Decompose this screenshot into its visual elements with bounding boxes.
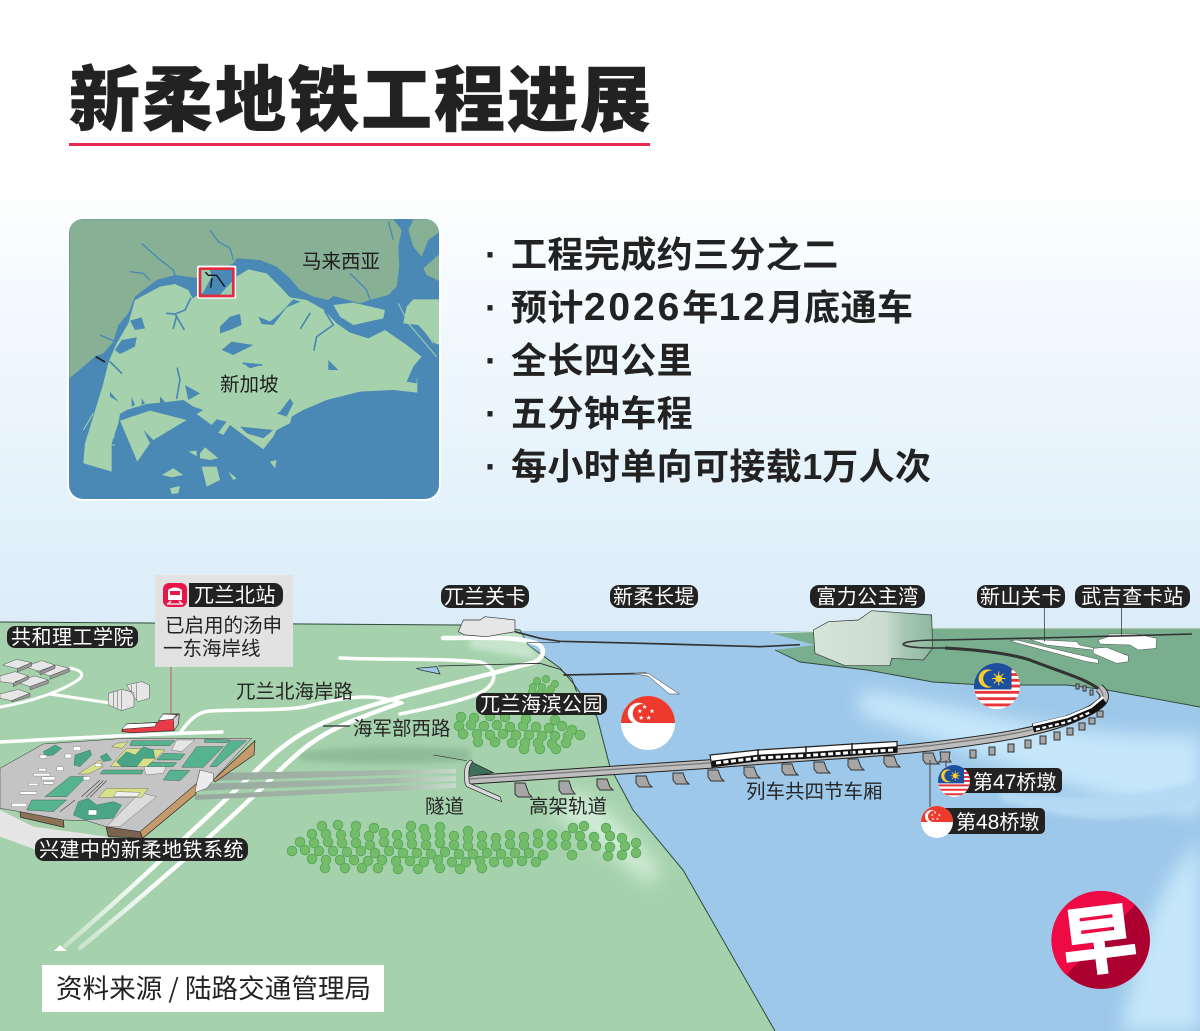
map label: Malaysia: 马来西亚 bbox=[302, 245, 380, 274]
viaduct piers bbox=[515, 684, 1103, 797]
Woodlands checkpoint building bbox=[458, 617, 515, 637]
Singapore flag bbox=[621, 696, 675, 750]
Republic Polytechnic buildings bbox=[0, 659, 149, 711]
train on the curve bbox=[1033, 697, 1104, 730]
Zaobao logo: 早 bbox=[1055, 878, 1142, 993]
key facts list: · bbox=[485, 340, 497, 381]
site yellow plazas bbox=[78, 742, 165, 797]
tree clusters bbox=[292, 679, 636, 869]
title: 新柔地铁工程进展 bbox=[69, 44, 653, 146]
label: Bukit Chagar station: 武吉查卡站 bbox=[1081, 580, 1184, 610]
label: Johor checkpoint: 新山关卡 bbox=[980, 580, 1062, 610]
key facts list: 全长四公里 bbox=[511, 332, 693, 384]
key facts list: · bbox=[485, 393, 497, 434]
label: Woodlands Waterfront Park: 兀兰海滨公园 bbox=[480, 688, 603, 717]
Woodlands North station building bbox=[122, 714, 179, 733]
roads bbox=[0, 638, 543, 951]
key facts list: · bbox=[485, 446, 497, 487]
label: Woodlands Checkpoint: 兀兰关卡 bbox=[444, 580, 526, 610]
train crossing the Strait bbox=[710, 742, 897, 767]
label: Woodlands North Coast Road: 兀兰北海岸路 bbox=[236, 675, 353, 704]
key facts list: · bbox=[485, 234, 497, 275]
label: four-car train: 列车共四节车厢 bbox=[746, 775, 883, 804]
key facts list: 每小时单向可接载1万人次 bbox=[511, 438, 931, 490]
key facts list: 五分钟车程 bbox=[511, 385, 693, 437]
construction site of the RTS Link system bbox=[0, 738, 255, 857]
key facts list: 工程完成约三分之二 bbox=[511, 226, 839, 278]
label: pier 48 with Singapore flag: 第48桥墩 bbox=[956, 806, 1039, 835]
site trees bbox=[43, 745, 155, 820]
key facts list: 预计2026年12月底通车 bbox=[511, 279, 913, 331]
label: Woodlands North station panel: 一东海岸线 bbox=[163, 632, 261, 661]
underground tunnel tracks bbox=[195, 769, 456, 800]
key facts list bbox=[485, 226, 931, 490]
map label: Singapore: 新加坡 bbox=[220, 368, 279, 397]
leader line to the station bbox=[170, 667, 172, 715]
label: pier 47 with Malaysia flag bbox=[938, 760, 1062, 797]
RTS Link line on Johor side bbox=[903, 634, 1192, 690]
Malaysia flag bbox=[974, 663, 1020, 709]
site brown retaining walls bbox=[20, 741, 255, 838]
label: Republic Polytechnic: 共和理工学院 bbox=[11, 621, 134, 650]
source note: 资料来源 / 陆路交通管理局 bbox=[56, 967, 371, 1006]
Johor checkpoint and Bukit Chagar station buildings bbox=[1010, 608, 1157, 663]
tunnel portal bbox=[433, 755, 502, 802]
label: Woodlands North station panel: 已启用的汤申 bbox=[165, 609, 282, 638]
locator map of Singapore bbox=[67, 217, 441, 501]
key facts list: · bbox=[485, 287, 497, 328]
illustration: Malaysia shore bbox=[770, 628, 1200, 707]
site green courtyards bbox=[27, 739, 247, 812]
label: pier 48 with Singapore flag bbox=[921, 760, 1045, 838]
Johor-Singapore Causeway bbox=[417, 632, 800, 694]
label: Admiralty Road West: 海军部西路 bbox=[353, 712, 451, 741]
label: Forest City: 富力公主湾 bbox=[816, 580, 919, 610]
label: RTS Link under construction: 兴建中的新柔地铁系统 bbox=[39, 834, 244, 862]
label: viaduct: 高架轨道 bbox=[529, 790, 607, 819]
illustration: sea bbox=[500, 631, 1200, 1031]
elevated viaduct bbox=[468, 688, 1104, 780]
location marker: box around Woodlands bbox=[197, 266, 236, 299]
illustration: Singapore land bbox=[0, 622, 775, 1031]
label: Woodlands North station panel bbox=[155, 575, 293, 715]
label: Woodlands North station panel: 兀兰北站 bbox=[194, 579, 276, 608]
icon: train bbox=[163, 583, 187, 607]
Forest City development bbox=[813, 611, 933, 666]
label: pier 47 with Malaysia flag: 第47桥墩 bbox=[973, 766, 1056, 795]
label: tunnel: 隧道 bbox=[425, 790, 464, 819]
label: Causeway: 新柔长堤 bbox=[613, 580, 695, 610]
